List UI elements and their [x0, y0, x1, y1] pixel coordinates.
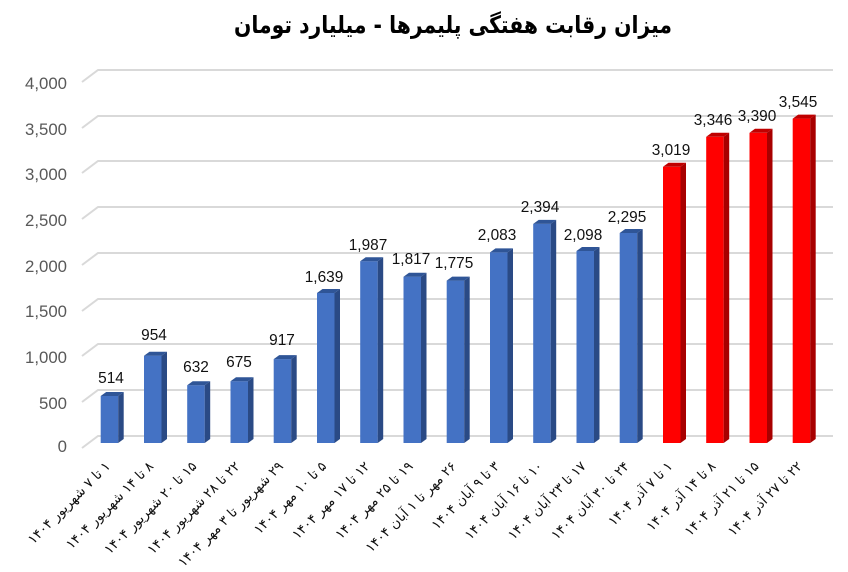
data labels: 3,545 — [779, 94, 817, 111]
y axis labels: 0 — [58, 437, 67, 456]
x axis category labels: ۱ تا ۷ شهریور ۱۴۰۴ — [25, 459, 114, 548]
data labels: 1,639 — [305, 269, 343, 286]
x axis category labels: ۱۰ تا ۱۶ آبان ۱۴۰۴ — [461, 458, 546, 543]
x axis category labels: ۱۵ تا ۲۰ شهریور ۱۴۰۴ — [102, 459, 200, 558]
data labels: 3,019 — [652, 142, 690, 159]
x axis category labels: ۱ تا ۷ آذر ۱۴۰۴ — [604, 458, 676, 529]
data labels: 675 — [226, 354, 252, 371]
data labels: 1,987 — [349, 237, 387, 254]
data labels: 3,390 — [738, 108, 776, 125]
y axis labels — [25, 74, 67, 456]
x axis category labels: ۲۴ تا ۳۰ آبان ۱۴۰۴ — [547, 458, 633, 543]
x axis category labels: ۱۲ تا ۱۷ مهر ۱۴۰۴ — [290, 459, 373, 543]
chart gridlines — [82, 70, 833, 448]
x axis category labels: ۸ تا ۱۴ آذر ۱۴۰۴ — [643, 458, 719, 534]
y axis labels: 1,500 — [25, 302, 67, 321]
x axis category labels: ۲۲ تا ۲۸ شهریور ۱۴۰۴ — [145, 459, 244, 558]
y axis labels: 3,000 — [25, 165, 67, 184]
x axis category labels — [25, 458, 806, 570]
bars: red series — [663, 115, 816, 443]
data labels: 1,817 — [392, 251, 430, 268]
x axis category labels: ۸ تا ۱۴ شهریور ۱۴۰۴ — [64, 459, 157, 553]
x axis category labels: ۲۹ شهریور تا ۳ مهر ۱۴۰۴ — [176, 459, 287, 570]
x axis category labels: ۲۲ تا ۲۷ آذر ۱۴۰۴ — [724, 458, 806, 540]
data labels: 954 — [141, 327, 167, 344]
data labels: 2,098 — [564, 227, 602, 244]
data labels: 2,083 — [478, 227, 516, 244]
y axis labels: 2,500 — [25, 211, 67, 230]
x axis category labels: ۵ تا ۱۰ مهر ۱۴۰۴ — [252, 459, 330, 538]
data labels — [98, 94, 817, 387]
y axis labels: 2,000 — [25, 257, 67, 276]
data labels: 632 — [183, 359, 209, 376]
y axis labels: 3,500 — [25, 120, 67, 139]
data labels: 2,295 — [608, 209, 646, 226]
data labels: 1,775 — [435, 255, 473, 272]
y axis labels: 1,000 — [25, 348, 67, 367]
data labels: 514 — [98, 370, 124, 387]
x axis category labels: ۱۵ تا ۲۱ آذر ۱۴۰۴ — [681, 458, 763, 540]
x axis category labels: ۱۷ تا ۲۳ آبان ۱۴۰۴ — [504, 458, 590, 543]
bars: blue series — [101, 220, 643, 443]
x axis category labels: ۳ تا ۹ آبان ۱۴۰۴ — [428, 458, 503, 533]
x axis category labels: ۲۶ مهر تا ۱ آبان ۱۴۰۴ — [362, 458, 460, 556]
x axis category labels: ۱۹ تا ۲۵ مهر ۱۴۰۴ — [333, 459, 417, 543]
title: میزان رقابت هفتگی پلیمرها - میلیارد تومان — [234, 11, 672, 39]
y axis labels: 4,000 — [25, 74, 67, 93]
data labels: 2,394 — [521, 199, 560, 216]
data labels: 917 — [269, 332, 295, 349]
y axis labels: 500 — [39, 394, 67, 413]
data labels: 3,346 — [694, 112, 732, 129]
